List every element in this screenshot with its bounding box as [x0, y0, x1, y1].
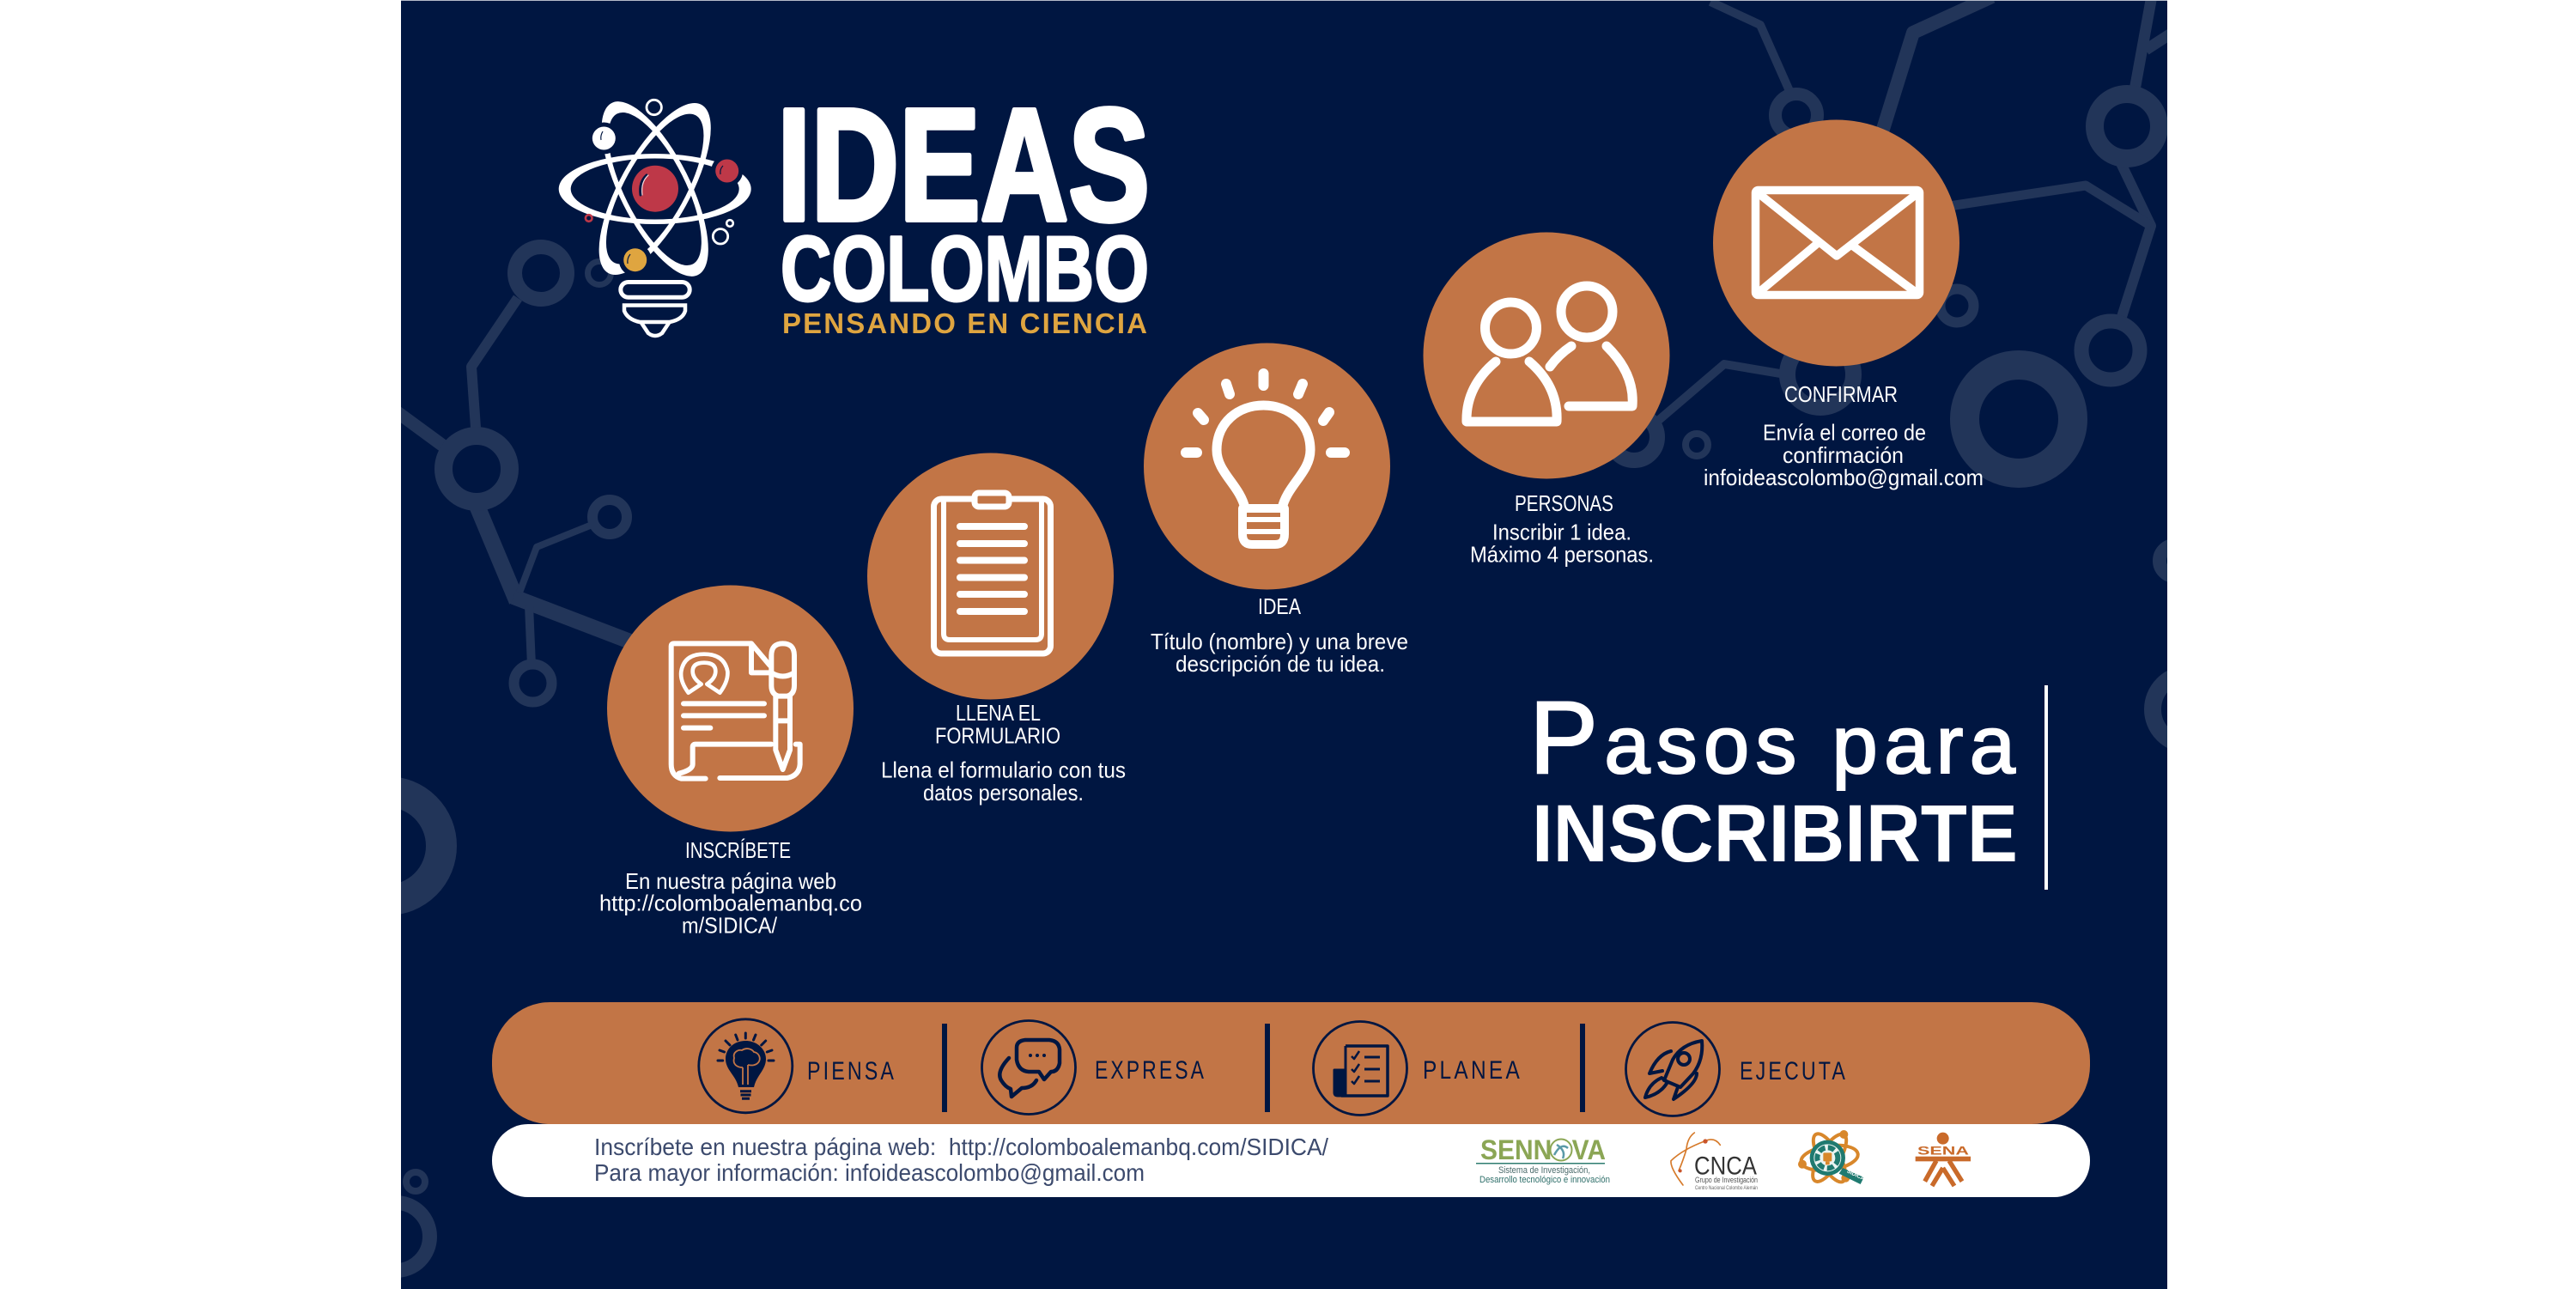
step 1 heading: INSCRÍBETE	[685, 837, 791, 863]
step 2 description: Llena el formulario con tus	[881, 757, 1126, 783]
step 1 circle	[607, 586, 854, 831]
icon: brain bulb	[699, 1019, 793, 1113]
logo: CNCA: Grupo de Investigación	[1695, 1176, 1758, 1184]
step 4 description	[1470, 519, 1654, 567]
step 2 description: datos personales.	[923, 780, 1084, 806]
step 5 description	[1704, 419, 1984, 490]
step 4 circle	[1424, 232, 1669, 479]
label: EXPRESA: EXPRESA	[1095, 1056, 1206, 1085]
logo: SENNOVA	[1476, 1134, 1610, 1185]
label: PLANEA: PLANEA	[1423, 1056, 1522, 1085]
item: Ejecuta	[1626, 1022, 1848, 1116]
divider	[1580, 1024, 1585, 1112]
icon: rocket	[1626, 1022, 1719, 1116]
title line 2: INSCRIBIRTE	[1532, 788, 2018, 879]
poster background	[401, 1, 2167, 1289]
step 4: Personas	[1424, 232, 1669, 567]
step 1 description	[599, 868, 862, 938]
logo: SENNOVA: SENNOVA	[1480, 1134, 1606, 1165]
icon: light bulb	[1186, 374, 1345, 544]
title line 1: Pasos para	[1529, 680, 2016, 795]
background molecule network	[333, 0, 2223, 1271]
logo: SENNOVA: Desarrollo tecnológico e innovación	[1479, 1175, 1610, 1185]
icon: atom light bulb	[559, 87, 751, 336]
logo: CNCA: CNCA	[1694, 1152, 1757, 1180]
icon: speech bubbles	[982, 1020, 1075, 1115]
label: PIENSA: PIENSA	[807, 1057, 896, 1085]
logo: SIDICA: SIDICA	[1846, 1169, 1866, 1183]
wordmark: IDEAS: IDEAS	[777, 76, 1150, 254]
step 3 heading: IDEA	[1258, 593, 1302, 619]
logo: CNCA	[1671, 1133, 1758, 1191]
item: Piensa	[699, 1019, 896, 1113]
step 4 description: Inscribir 1 idea.	[1492, 519, 1631, 544]
icon: two people	[1467, 286, 1632, 422]
logo: SENNOVA: Sistema de Investigación,	[1498, 1165, 1590, 1176]
icon: checklist	[1314, 1022, 1406, 1115]
logo: SENA: SENA	[1917, 1144, 1969, 1158]
step 2 heading: FORMULARIO	[935, 723, 1060, 749]
step 1 description: m/SIDICA/	[682, 912, 778, 938]
registration web text: Inscríbete en nuestra página web: http://colomboalemanbq.com/SIDICA/	[594, 1134, 1328, 1160]
divider	[942, 1024, 947, 1112]
orange band: Piensa, Expresa, Planea, Ejecuta	[492, 1002, 2090, 1124]
wordmark: COLOMBO: COLOMBO	[781, 216, 1149, 320]
step 2 description	[881, 757, 1126, 806]
item: Planea	[1314, 1022, 1522, 1115]
step 3 description: Título (nombre) y una breve	[1151, 629, 1408, 654]
step 5 heading: CONFIRMAR	[1784, 381, 1898, 407]
step 2: Llena el formulario	[867, 453, 1126, 806]
step 3 circle	[1144, 344, 1390, 589]
step 5: Confirmar	[1704, 120, 1984, 490]
step 1: Inscríbete	[599, 586, 862, 938]
logo: Ideas Colombo	[559, 76, 1150, 339]
title: Pasos para inscribirte	[1529, 680, 2048, 890]
step 1 description: En nuestra página web	[625, 868, 836, 894]
step 4 heading: PERSONAS	[1515, 490, 1613, 516]
step 4 description: Máximo 4 personas.	[1470, 541, 1654, 567]
icon: clipboard	[934, 493, 1051, 654]
icon: form with pen	[671, 643, 800, 779]
orange band background	[492, 1002, 2090, 1124]
white band background	[492, 1124, 2090, 1197]
logo: SENA	[1916, 1133, 1971, 1186]
step 5 description: infoideascolombo@gmail.com	[1704, 465, 1984, 490]
step 3 description	[1151, 629, 1408, 677]
logo: CNCA: Centro Nacional Colombo Alemán	[1695, 1186, 1758, 1191]
step 3: Idea	[1144, 344, 1408, 677]
icon: envelope	[1755, 191, 1920, 295]
white contact band	[492, 1124, 2090, 1197]
step 1 description: http://colomboalemanbq.co	[599, 890, 862, 915]
step 2 circle	[867, 453, 1114, 699]
step 5 description: Envía el correo de	[1763, 419, 1926, 445]
contact email text: Para mayor información: infoideascolombo@gmail.com	[594, 1159, 1145, 1186]
step 2 heading	[935, 700, 1060, 749]
step 2 heading: LLENA EL	[956, 700, 1041, 726]
label: EJECUTA: EJECUTA	[1740, 1057, 1848, 1085]
item: Expresa	[982, 1020, 1206, 1115]
step 3 description: descripción de tu idea.	[1176, 651, 1385, 677]
tagline: PENSANDO EN CIENCIA	[782, 307, 1147, 339]
step 5 description: confirmación	[1783, 442, 1904, 468]
title vertical rule	[2044, 685, 2048, 890]
logo: SIDICA	[1798, 1129, 1866, 1187]
step 5 circle	[1713, 120, 1959, 366]
divider	[1265, 1024, 1270, 1112]
